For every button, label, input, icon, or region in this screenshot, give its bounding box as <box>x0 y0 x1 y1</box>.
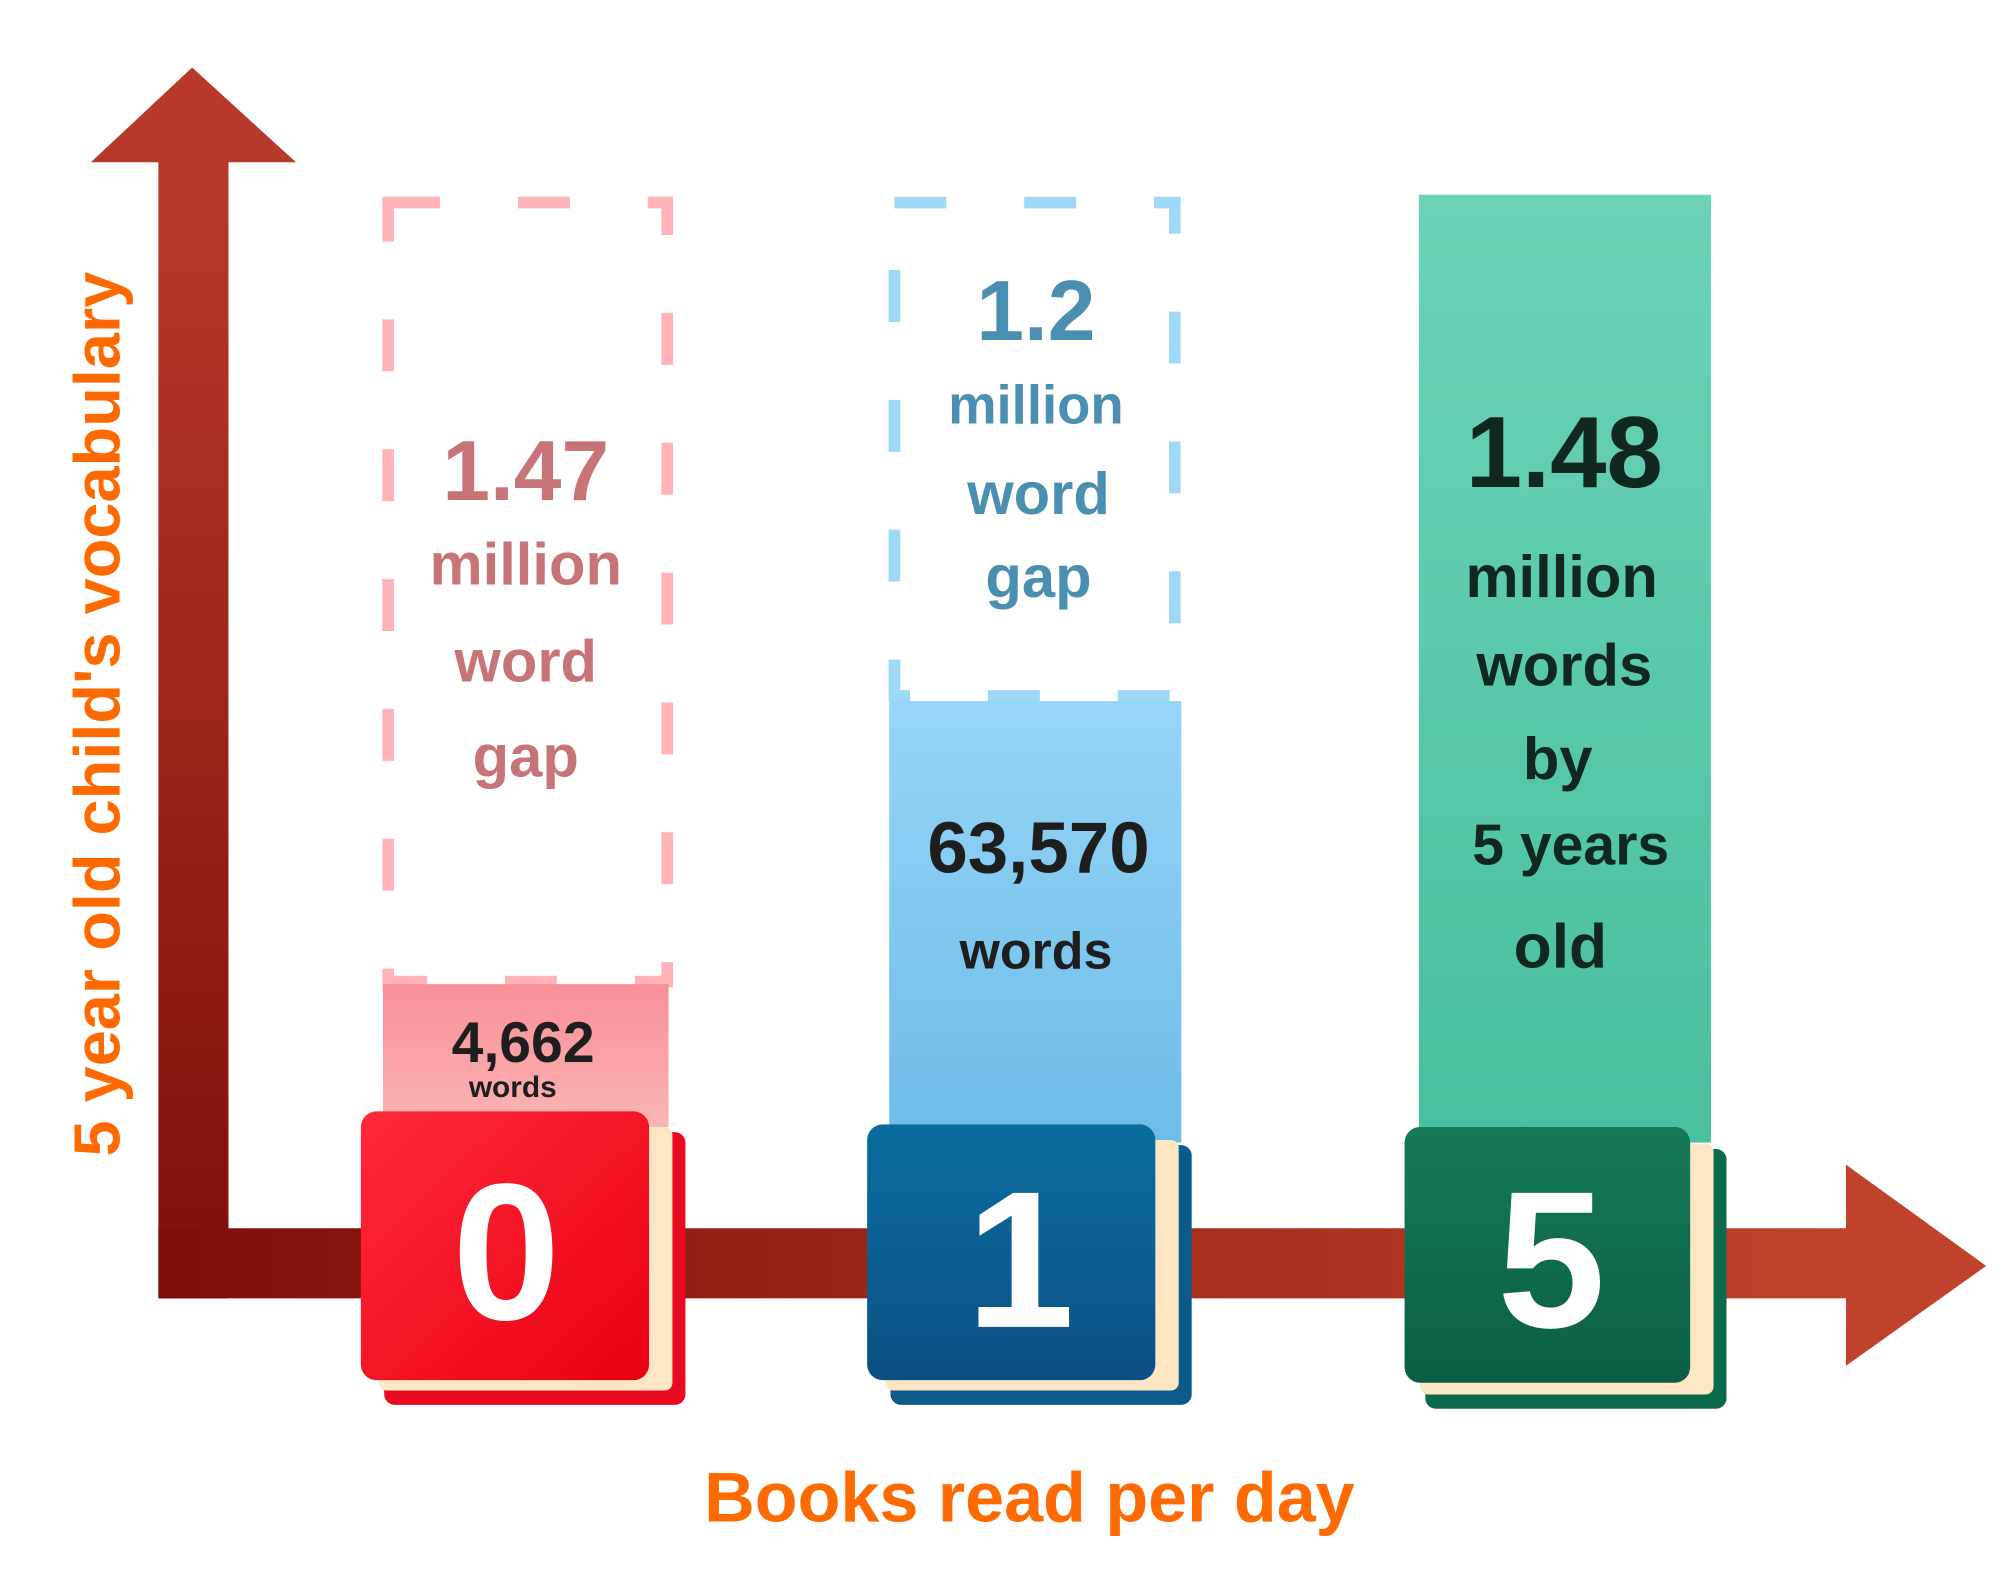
book 0 <box>361 1111 685 1405</box>
y axis arrow <box>91 68 296 1298</box>
gap label 1: gap <box>985 543 1092 610</box>
book 0: 0 <box>452 1144 560 1361</box>
gap label 1: word <box>966 460 1110 527</box>
y axis label: 5 year old child's vocabulary <box>60 272 133 1157</box>
value 0 <box>452 1011 595 1104</box>
value 0: 4,662 <box>452 1011 595 1075</box>
book 5: 5 <box>1497 1152 1605 1369</box>
book 5 <box>1405 1127 1727 1409</box>
book 1 <box>867 1124 1192 1405</box>
bar 5: by <box>1523 725 1593 792</box>
gap label 0: gap <box>473 722 579 789</box>
bar 5: old <box>1514 912 1607 981</box>
gap label 1: million <box>948 374 1124 435</box>
bar 5: million <box>1465 543 1658 610</box>
bar 0 <box>383 203 669 1127</box>
value 1: words <box>958 923 1112 981</box>
bar 5: 1.48 <box>1466 396 1663 509</box>
gap label 0 <box>430 423 622 789</box>
gap label 0: 1.47 <box>442 423 609 519</box>
value 1 <box>927 807 1150 981</box>
value 0: words <box>468 1071 557 1104</box>
bar 5 <box>1419 195 1711 1143</box>
x axis label: Books read per day <box>704 1459 1355 1537</box>
gap label 0: million <box>430 530 622 597</box>
bar 5: words <box>1475 632 1652 699</box>
bar 5: 5 years <box>1472 814 1669 878</box>
gap label 0: word <box>453 628 597 695</box>
x axis arrow <box>158 1165 1986 1366</box>
gap label 1 <box>948 263 1124 610</box>
gap label 1: 1.2 <box>976 263 1095 359</box>
bar 1 <box>889 203 1181 1143</box>
book 1: 1 <box>966 1152 1074 1369</box>
value 1: 63,570 <box>927 807 1150 888</box>
